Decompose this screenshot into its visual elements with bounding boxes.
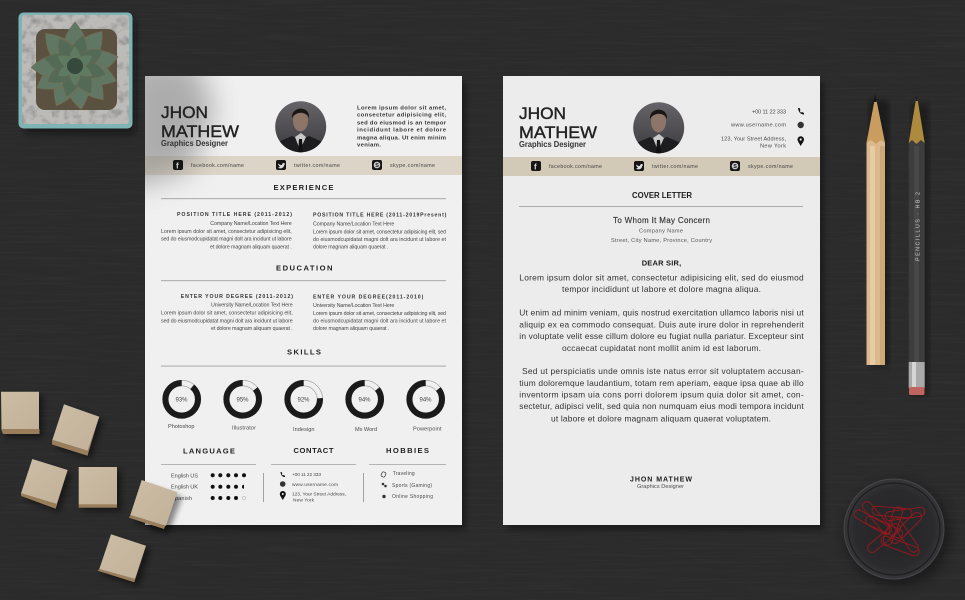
- name: JHON: [519, 105, 566, 123]
- name: [161, 104, 239, 141]
- skill donut: Illustrator 95%: [224, 380, 262, 431]
- experience left: POSITION TITLE HERE (2011-2012): [177, 212, 292, 218]
- contact section: [263, 446, 356, 504]
- plant shadow on page: [145, 76, 227, 199]
- black pencil: [909, 96, 929, 396]
- experience left: sed do eiusmodcupidatat magni dolt ara incidunt ut labore: [161, 237, 292, 243]
- portrait: [275, 101, 326, 152]
- education left: University Name/Location Text Here: [211, 302, 293, 308]
- skill donut: Ms Word 94%: Ms Word: [355, 427, 377, 433]
- contact section: 123, Your Street Address,: [292, 492, 346, 498]
- letter paragraph 2: Ut enim ad minim veniam, quis nostrud exercitation ullamco laboris nisi ut: [519, 308, 804, 318]
- name: MATHEW: [161, 123, 239, 141]
- skill donut: Powerpoint 94%: 94%: [420, 398, 432, 404]
- experience right: Company Name/Location Text Here: [313, 221, 394, 227]
- social links: facebook.com/name: [549, 164, 602, 170]
- signature: [630, 476, 692, 490]
- signature: JHON MATHEW: [630, 476, 692, 484]
- portrait: [633, 102, 684, 154]
- hobbies section: HOBBIES: [386, 446, 429, 455]
- name: JHON: [161, 104, 208, 122]
- skill donut: Photoshop 93%: 93%: [176, 398, 188, 404]
- letter paragraph 3: sectetur, adipisci velit, sed quia non numquam eius modi tempora incidunt: [519, 401, 804, 411]
- contact details: New York: [760, 143, 786, 149]
- experience right: Lorem ipsum dolor sit amet, consectetur adipisicing elit, sed: [313, 230, 446, 236]
- signature: Graphics Designer: [637, 484, 684, 490]
- skill donut: Photoshop 93%: Photoshop: [168, 424, 194, 430]
- letter paragraph 2: occaecat cupidatat nont mollit anim id est laborum.: [562, 343, 761, 353]
- letter paragraph 3: inventorm ipsam uia cons porri dolorem ipsum quia dolor sit amet, con-: [519, 390, 804, 400]
- education left: et dolore magnam aliquam quaerat .: [211, 326, 293, 332]
- skill donut: Powerpoint 94%: Powerpoint: [413, 426, 442, 432]
- education right: do eiusmodcupidatat magni dolt ara incidunt ut labore et: [313, 318, 447, 324]
- header band: [145, 156, 462, 175]
- language section: English US: [171, 473, 198, 479]
- salutation: DEAR SIR,: [642, 259, 681, 268]
- intro paragraph: magna aliqua. Ut enim minim: [357, 135, 446, 141]
- paper clips: [852, 500, 925, 557]
- intro paragraph: veniam.: [357, 143, 381, 149]
- hobbies section: Sports (Gaming): [392, 483, 432, 489]
- skill donut: Illustrator 95%: Illustrator: [232, 425, 256, 431]
- job title: Graphics Designer: [161, 139, 229, 148]
- cover letter page: [503, 76, 824, 530]
- social links: [531, 161, 793, 172]
- education left: Lorem ipsum dolor sit amet, consectetur adipisicing elit,: [161, 311, 293, 317]
- letter paragraph 3: [519, 366, 804, 424]
- social links: facebook.com/name: [191, 163, 244, 169]
- contact details: +00 11 22 333: [752, 109, 786, 115]
- education right: University Name/Location Text Here: [313, 303, 394, 309]
- name: [519, 105, 597, 142]
- social links: skype.com/name: [748, 164, 793, 170]
- education left: ENTER YOUR DEGREE (2011-2012): [181, 294, 293, 300]
- experience left: et dolore magnam aliquam quaerat .: [210, 244, 292, 250]
- language section: LANGUAGE: [183, 446, 235, 456]
- social links: [173, 160, 435, 171]
- language section: Spanish: [171, 496, 192, 502]
- experience right: POSITION TITLE HERE (2011-2019Present): [313, 212, 447, 218]
- skill donut: Powerpoint 94%: [407, 380, 445, 432]
- language section: [161, 446, 256, 502]
- addressee: Street, City Name, Province, Country: [611, 238, 712, 244]
- hobbies section: Online Shopping: [392, 494, 433, 500]
- wooden blocks: [1, 392, 182, 587]
- hobbies section: [363, 446, 446, 502]
- pencil imprint: PENCILLUS · HB 2: [916, 192, 922, 261]
- experience left: Company Name/Location Text Here: [210, 221, 292, 227]
- social links: skype.com/name: [390, 163, 435, 169]
- skill donut: Photoshop 93%: [163, 380, 201, 430]
- job title: Graphics Designer: [519, 140, 587, 149]
- skill donut: Indesign 92%: [285, 380, 323, 433]
- letter paragraph 3: Sed ut perspiciatis unde omnis iste natus error sit voluptatem accusan-: [522, 366, 804, 376]
- experience heading: EXPERIENCE: [274, 183, 334, 192]
- education left: [161, 294, 293, 332]
- header band: [503, 157, 820, 176]
- letter paragraph 3: ut labore et dolore magnam aliquam quaerat voluptatem.: [551, 414, 771, 424]
- plant pot with succulent: [18, 12, 136, 134]
- letter paragraph 2: aliquip ex ea commodo consequat. Duis aute irure dolor in reprehenderit: [519, 320, 804, 330]
- social links: twitter.com/name: [652, 164, 698, 170]
- education right: ENTER YOUR DEGREE(2011-2010): [313, 294, 424, 300]
- cover letter heading: COVER LETTER: [632, 191, 692, 200]
- social links: f: [176, 162, 179, 171]
- social links: S: [375, 163, 379, 169]
- letter paragraph 1: [519, 272, 804, 294]
- social links: S: [733, 164, 737, 170]
- experience left: Lorem ipsum dolor sit amet, consectetur adipisicing elit,: [161, 229, 292, 235]
- contact details: www.username.com: [730, 123, 786, 129]
- addressee: [611, 216, 712, 244]
- skill donut: Indesign 92%: Indesign: [293, 427, 314, 433]
- resume page: [125, 60, 466, 530]
- addressee: Company Name: [639, 228, 683, 234]
- skill donut: Illustrator 95%: 95%: [236, 398, 249, 404]
- addressee: To Whom It May Concern: [613, 216, 710, 225]
- letter paragraph 1: Lorem ipsum dolor sit amet, consectetur adipisicing elit, sed do eiusmod: [519, 272, 804, 282]
- contact section: +00 11 22 333: [292, 472, 321, 478]
- experience right: dolore magnam aliquam quaerat .: [313, 245, 388, 251]
- hobbies section: Traveling: [393, 471, 415, 477]
- intro paragraph: consectetur adipisicing elit,: [357, 113, 446, 119]
- wooden pencil: [866, 94, 889, 367]
- tray of red paper clips: [844, 479, 950, 586]
- intro paragraph: Lorem ipsum dolor sit amet,: [357, 105, 446, 111]
- experience right: do eiusmodcupidatat magni dolt ara incidunt ut labore et: [313, 237, 447, 243]
- education heading: EDUCATION: [276, 264, 332, 272]
- experience right: [313, 212, 447, 251]
- social links: twitter.com/name: [294, 163, 340, 169]
- skill donut: Indesign 92%: 92%: [298, 398, 310, 404]
- letter paragraph 3: tium doloremque laudantium, totam rem aperiam, eaque ipsa quae ab illo: [519, 378, 804, 388]
- education left: sed do eiusmodcupidatat magni dolt ara incidunt ut labore: [161, 318, 293, 324]
- intro paragraph: sed do eiusmod is an tempor: [357, 120, 447, 126]
- education right: Lorem ipsum dolor sit amet, consectetur adipisicing elit, sed: [313, 311, 446, 317]
- intro paragraph: [357, 105, 447, 149]
- education right: dolore magnam aliquam quaerat .: [313, 326, 389, 332]
- letter paragraph 2: [519, 308, 804, 353]
- skill donut: Ms Word 94%: [346, 380, 384, 433]
- intro paragraph: incididunt labore et dolore: [357, 128, 447, 134]
- contact section: CONTACT: [294, 446, 334, 455]
- education right: [313, 294, 447, 332]
- contact section: New York: [293, 498, 315, 504]
- letter paragraph 2: in voluptate velit esse cillum dolore eu fugiat nulla pariatur. Excepteur sint: [519, 331, 804, 341]
- language section: English UK: [171, 485, 198, 491]
- name: MATHEW: [519, 124, 597, 142]
- experience left: [161, 212, 292, 250]
- contact details: [721, 108, 804, 149]
- contact details: 123, Your Street Address,: [721, 136, 786, 142]
- skills heading: SKILLS: [287, 348, 321, 356]
- social links: f: [534, 163, 537, 172]
- letter paragraph 1: tempor incididunt ut labore et dolore magna aliqua.: [562, 284, 761, 294]
- contact section: www.username.com: [292, 482, 338, 488]
- skill donut: Ms Word 94%: 94%: [358, 398, 371, 404]
